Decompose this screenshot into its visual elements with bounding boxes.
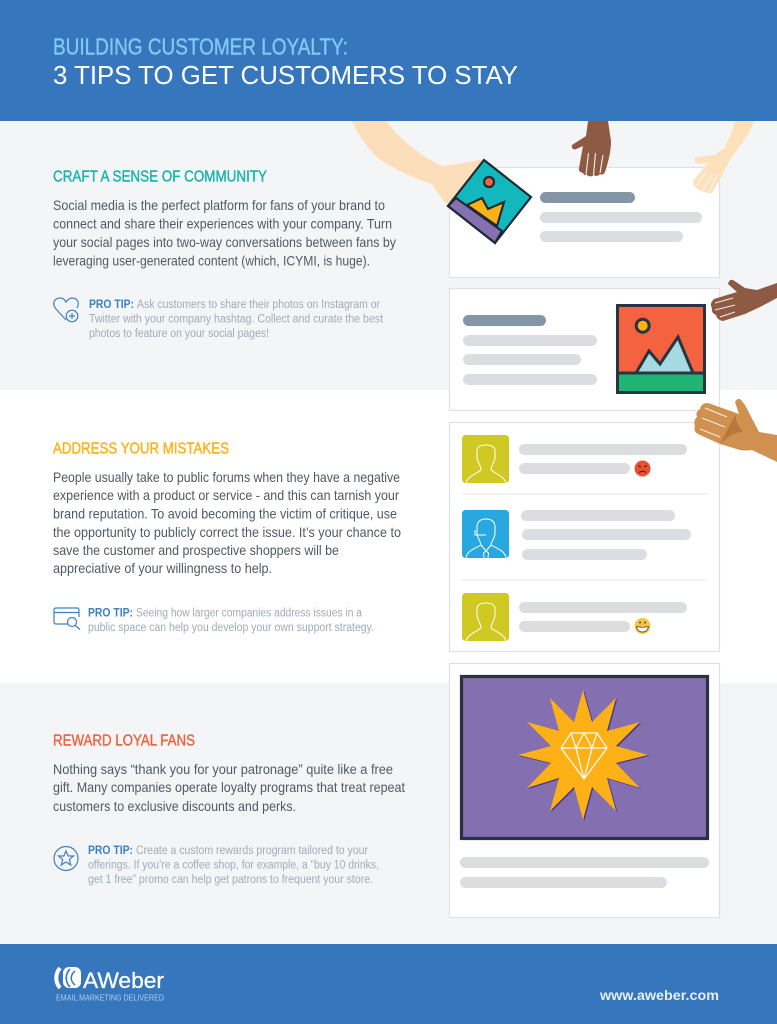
title: 3 TIPS TO GET CUSTOMERS TO STAY: [53, 60, 518, 90]
footer banner: [0, 944, 777, 1024]
body text: mistakes: the opportunity to publicly correct the issue. It’s your chance to: [53, 524, 401, 540]
logo: AWeber: EMAIL MARKETING DELIVERED: [56, 994, 164, 1002]
pro tip: mistakes: PRO TIP:: [88, 608, 133, 620]
pro tip: community: photos to feature on your social pages!: [89, 328, 269, 340]
body text: community: [53, 197, 396, 268]
pro tip: rewards: Create a custom rewards program tailored to your: [136, 845, 368, 857]
body text: mistakes: appreciative of your willingness to help.: [53, 560, 272, 576]
card: customer comments: [450, 422, 720, 652]
comment: angry customer: [462, 435, 687, 483]
pro tip: mistakes: [88, 608, 374, 634]
body text: rewards: [53, 761, 405, 814]
body text: mistakes: brand reputation. To avoid becoming the victim of critique, use: [53, 506, 397, 522]
body text: rewards: Nothing says “thank you for your patronage” quite like a free: [53, 761, 393, 777]
illustration: dark hand from top: [572, 121, 611, 176]
pro tip: community: Ask customers to share their photos on Instagram or: [137, 299, 380, 311]
body text: community: leveraging user-generated content (which, ICYMI, is huge).: [53, 252, 370, 268]
header banner: [0, 0, 777, 121]
illustration: dark hand from right: [711, 280, 777, 321]
logo: AWeber: [56, 967, 164, 1002]
body text: community: Social media is the perfect platform for fans of your brand to: [53, 197, 385, 213]
panel: community text: [53, 168, 396, 340]
body text: community: connect and share their experiences with your company. Turn: [53, 216, 392, 232]
body text: rewards: customers to exclusive discounts and perks.: [53, 798, 296, 814]
icon: browser window with magnifier: [54, 608, 80, 630]
panel: rewards text: [53, 732, 405, 886]
card: social post two: [450, 288, 720, 410]
website url: www.aweber.com: [599, 987, 719, 1003]
illustration: arm holding tilted photo: [352, 121, 531, 243]
title: BUILDING CUSTOMER LOYALTY:: [53, 34, 348, 60]
body text: rewards: gift. Many companies operate loyalty programs that treat repeat: [53, 779, 405, 795]
title: [53, 34, 518, 90]
card: reward: [450, 664, 720, 918]
illustration: light hand from top right: [693, 121, 754, 193]
icon: tilted teal photo: [448, 160, 531, 243]
icon: star in circle: [54, 846, 78, 870]
icon: heart with plus: [54, 298, 78, 322]
logo: AWeber: AWeber: [83, 968, 164, 993]
panel: mistakes text: [53, 440, 401, 634]
illustration: tan hand from right: [694, 399, 777, 462]
pro tip: community: PRO TIP:: [89, 299, 134, 311]
comment: happy customer: [462, 593, 687, 641]
body text: mistakes: [53, 469, 401, 576]
pro tip: rewards: PRO TIP:: [88, 845, 133, 857]
body text: mistakes: People usually take to public forums when they have a negative: [53, 469, 400, 485]
icon: orange landscape photo: [618, 306, 704, 392]
pro tip: rewards: get 1 free” promo can help get patrons to frequent your store.: [88, 874, 373, 886]
body text: community: your social pages into two-way conversations between fans by: [53, 234, 396, 250]
pro tip: rewards: offerings. If you’re a coffee shop, for example, a “buy 10 drinks,: [88, 860, 379, 872]
icon: diamond: [561, 733, 607, 779]
body text: mistakes: experience with a product or service - and this can tarnish your: [53, 487, 399, 503]
card: social post one: [450, 168, 720, 278]
icon: AWeber waves: [56, 967, 81, 988]
pro tip: mistakes: public space can help you develop your own support strategy.: [88, 622, 374, 634]
pro tip: community: [89, 299, 384, 340]
heading: reward loyal fans: REWARD LOYAL FANS: [53, 732, 195, 750]
heading: address your mistakes: ADDRESS YOUR MISTAKES: [53, 440, 229, 458]
reward image with starburst: [462, 676, 708, 838]
pro tip: community: Twitter with your company hashtag. Collect and curate the best: [89, 314, 384, 326]
pro tip: mistakes: Seeing how larger companies address issues in a: [136, 608, 363, 620]
body text: mistakes: save the customer and prospective shoppers will be: [53, 542, 339, 558]
heading: craft a sense of community: CRAFT A SENSE OF COMMUNITY: [53, 168, 267, 186]
comment: support agent: [462, 510, 691, 560]
pro tip: rewards: [88, 845, 379, 886]
